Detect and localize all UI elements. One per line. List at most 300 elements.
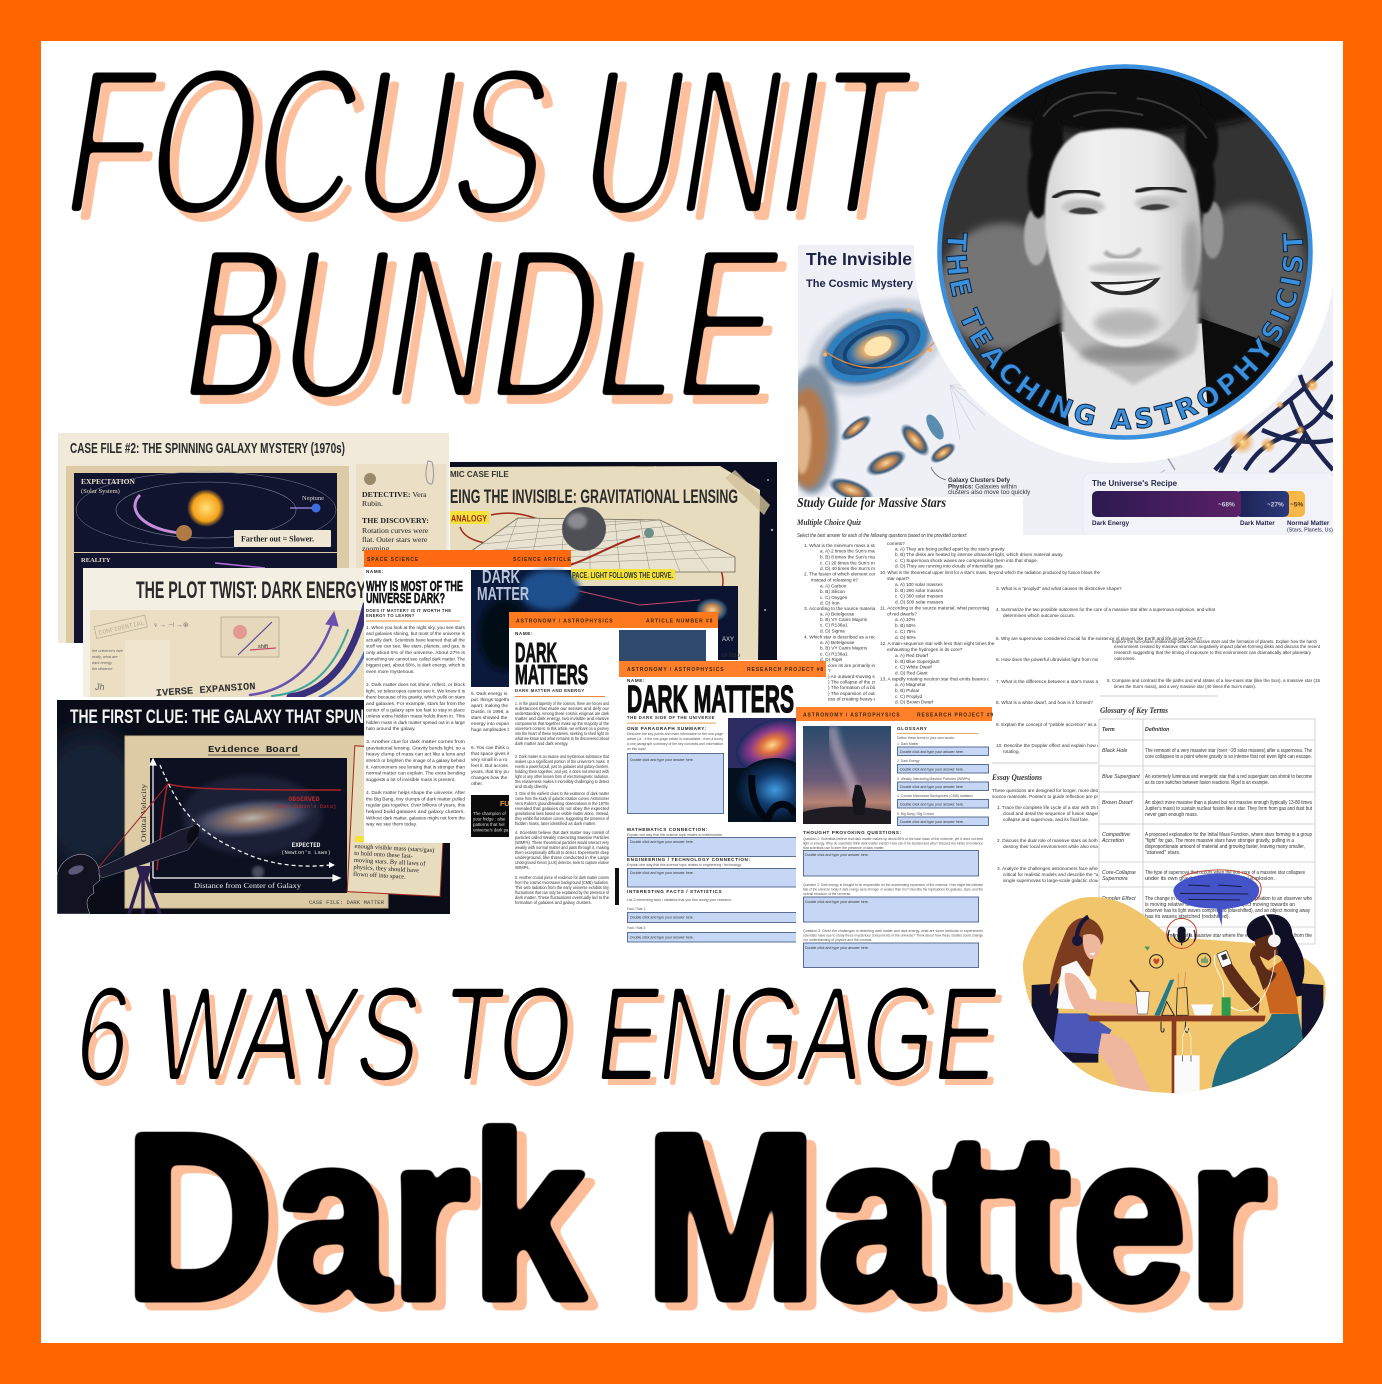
essay fragments: environment created by massive stars can negatively impact planet-forming disks and discuss the recent [1114,644,1321,649]
article body column: light or any other known form of electromagnetic radiation. [515,774,609,779]
heading: 6 ways to engage: 6 WAYS TO ENGAGE [68,958,1007,1109]
short answer questions: 9. Explain the concept of "pebble accretion" as a n [996,722,1101,727]
interesting facts: Double click and type your answer here. [630,916,694,920]
quiz column two: a. A) Magnetar [895,682,926,687]
quiz column one: 2. The fusion of which element con [804,572,877,576]
glossary table: Core-Collapse [1102,870,1136,876]
sidebar: detective notes: Rubin. [362,499,383,508]
article body column: matter and dark energy, two invisible and elusive [515,716,610,721]
quiz column two: 12. A main-sequence star with less than eight times the [880,641,995,646]
quiz column one: d. D) 40 times the Sun's mass [820,566,883,571]
short answer questions: 7. What is the difference between a star's mass an [996,679,1101,684]
article body column: gravitational lensing. Gravity bends light, so a [366,745,465,751]
interesting facts: Double click and type your answer here. [630,936,694,940]
article second column: huge amplitudes bo [471,727,513,733]
short answer questions: 6. How does the powerful ultraviolet light from mas [996,657,1102,662]
chairs [1032,983,1098,1063]
diagram: reality: REALITY [81,557,111,564]
rotation chart: (Vera Rubin's Data) [274,803,336,810]
left woman skirt [1052,1013,1112,1054]
quiz column two: a. A) 100 solar masses [895,582,943,587]
article header [509,612,718,628]
engineering connection: Explain one way that this science topic relates to engineering / technology: [627,863,742,867]
essay fragments [1107,639,1321,689]
thought provoking questions: Double click and type your answer here. [805,900,869,904]
expansion arrows [250,605,366,697]
bowling ball [562,507,606,551]
confidential stamp [94,615,147,638]
essay fragments: times the Sun's mass), and a very massive star (40 times the Sun's mass). [1114,684,1256,689]
table items: cup [1136,992,1149,1014]
eyebrows [1054,191,1098,197]
short answer questions: 10. Describe the Doppler effect and explain how col [996,743,1103,748]
project header [619,661,826,677]
title: bundle [169,203,806,454]
quiz column two: exhausting the hydrogen in its core? [887,647,963,652]
article body column: (WIMPs). These theoretical particles would interact very [515,840,610,845]
essay questions: 1. Trace the complete life cycle of a star with 25 tim [997,805,1103,810]
note card: to hold onto these fast- [354,850,413,860]
quiz column two: b. B) Blue Supergiant [895,659,940,664]
title: focus unit [51,24,932,268]
lensing heading: EING THE INVISIBLE: GRAVITATIONAL LENSING [450,487,738,508]
bar labels [1092,520,1333,532]
eye sockets [1062,199,1105,214]
article body column: there because of its gravity, which pulls on stars [366,695,466,701]
article body column: hidden mass, later identified as dark matter. [515,821,596,826]
article headline: WHY IS MOST OF THE [366,579,463,595]
project subhead: THE DARK SIDE OF THE UNIVERSE [627,715,715,720]
ears [1024,208,1048,265]
article body column: particles called Weakly Interacting Massive Particles [515,835,609,840]
fun fact box: universe's dark pa [473,828,509,832]
mouth [1090,277,1161,295]
essay fragments: 5. Compare and contrast the life paths and end states of a low-mass star (like the Sun), a massive star (15 [1107,678,1320,683]
bar labels: (Stars, Planets, Us) [1287,528,1333,534]
article body column: center of a galaxy spin too fast to stay in place [366,707,465,713]
bar values: ~5% [1290,502,1303,508]
evidence board [125,736,388,908]
essay questions: single supernovas to large-scale galactic clouds [1003,878,1103,883]
heading: 6 ways to engage [68,958,1013,1115]
article body column: the Big Bang, tiny clumps of dark matter pulled [366,796,465,802]
article headline: MATTERS [515,659,588,690]
hand notes: dark energy [92,661,113,665]
first clue heading: THE FIRST CLUE: THE GALAXY THAT SPUN [70,707,364,728]
article body column: underground, like those conducted in the Large [515,855,610,860]
smile lines [1088,262,1162,274]
glossary block: 5. Big Bang / Big Crunch [897,812,934,816]
quiz column one: b. B) VY Canis Majoris [820,646,868,650]
glossary block: GLOSSARY [897,726,927,731]
glossary table: is moving relative to the wave source. An object moving towards an [1145,902,1295,908]
glossary table: "fight" for gas. The more massive stars have stronger gravity, pulling in a [1145,838,1294,844]
article body column: components that together make up the majority of the [515,721,610,726]
article cover image: DARK [482,567,520,587]
article body column: heavy clump of mass can act like a lens and [366,752,465,758]
article body column: weakly with normal matter and pass through it, making [515,845,610,850]
bowl [1191,1004,1213,1015]
article subhead: ENERGY TO LEARN? [366,613,415,618]
sidebar: detective notes: flat. Outer stars were [362,535,428,544]
article body column: dark matter and dark energy. [515,741,569,746]
parchment [90,610,365,697]
article second column: very small in a ro [471,757,508,763]
illustration: web glows [1229,378,1319,455]
light follows tag: PACE. LIGHT FOLLOWS THE CURVE. [572,571,673,580]
quiz column one: c. C) 20 times the Sun's mass [820,560,883,566]
white ring [914,245,1333,463]
engineering connection: Double click and type your answer here. [630,871,694,875]
short answer questions [996,586,1216,754]
glossary block: 1. Dark Matter [897,742,919,746]
glossary table: core collapses to a point where gravity is so intense that not even light can escape. [1145,754,1312,760]
text block: study guide [796,495,1216,883]
note card: moving stars. By all laws of [354,857,426,868]
glossary table: has its waves stretched (redshifted). [1145,914,1230,920]
summary section: on this topic! [627,747,646,751]
article body column: 4. Scientists believe that dark matter may consist of [515,830,610,835]
light follows tag [571,569,675,580]
thought provoking questions [803,830,983,968]
hand notes: really, what are [92,655,117,659]
glossary table: Doppler Effect [1102,896,1136,902]
quiz column one: ) The formation of a black [828,685,882,690]
folder [66,466,349,643]
article body column: from the cosmic microwave background (CMB) radiation. [515,880,609,885]
math connection: Double click and type your answer here. [630,840,694,844]
earphone cable [1214,950,1275,1011]
article second column: Dustin. In 1998, also [471,709,515,715]
glossary table: Brown Dwarf [1102,800,1133,806]
glossary block: Double click and type your answer here. [900,802,964,806]
glossary table: The phenomenon of a massive star where the exterior is blown away from the [1145,933,1312,939]
portrait: the teaching astrophysicist [914,64,1333,463]
title: focus unit: FOCUS UNIT [51,24,923,259]
glossary table: The type of supernova that occurs when the iron core of a massive star collapses [1145,870,1305,876]
article body column: unless extra hidden mass holds them in. This [366,714,466,720]
quiz column two: star apart? [887,576,910,581]
article body column: Vera Rubin's groundbreaking observations in the 1970s [515,801,609,806]
quiz column two: b. B) 50% [895,623,916,628]
quiz column two: d. D) They are running into clouds of interstellar gas. [895,564,1004,568]
background blob [1023,897,1326,1093]
article header: ASTRONOMY / ASTROPHYSICS [516,618,613,624]
fun fact box: FU [500,801,509,808]
short answer questions: 8. What is a white dwarf, and how is it formed? [996,700,1093,705]
article second column: that space gives it [471,751,510,757]
short answer questions: 3. What is a "proplyd" and what causes its distinctive shape? [996,586,1122,591]
panel: article dark matters [509,612,718,907]
article body column: way we see them today. [366,822,417,828]
article second column: energy into expan [471,721,509,727]
rotation chart: Orbital Velocity [140,783,148,842]
quiz column two: b. B) Pulsar [895,688,920,693]
hand notes [92,649,123,692]
multiple choice heading: Multiple Choice Quiz [796,517,862,527]
thought provoking questions: our understanding of physics and the cosmos. [803,938,872,942]
red link line [98,784,168,868]
name label: NAME: [515,631,533,636]
article body column: 1. When you look at the night sky, you see stars [366,625,466,631]
title: focus unit: FOCUS UNIT [60,33,932,268]
curved name text: THE TEACHING ASTROPHYSICIST [946,232,1304,430]
quiz column two: c. C) Supernova shock waves are compressing them into that shape. [895,558,1038,563]
article body column: holding them together, and yet, it does not interact with [515,769,610,774]
observed curve [157,784,341,870]
bar labels: Dark Matter [1240,520,1275,527]
axes [150,759,340,881]
panel: plot twist dark energy [83,568,366,700]
bar: normal matter [1285,491,1305,517]
article subhead: DARK MATTER AND ENERGY [515,688,585,693]
left woman hair back [1050,918,1103,997]
article body column: actually dark. Scientists have learned that all the [366,637,465,643]
callout: galaxy clusters [931,467,1031,496]
interesting facts: INTERESTING FACTS / STATISTICS [627,889,722,894]
bar labels: Dark Energy [1092,520,1130,527]
shopping bag [1174,1055,1200,1094]
note card: physics, they should have [353,864,419,874]
heading: 6 ways to engage: 6 WAYS TO ENGAGE [74,964,1013,1115]
essay questions: source materials. Pointers to guide reflection are provid [992,794,1107,799]
left headphones [1077,917,1088,940]
speech bubble [1173,873,1259,926]
expected curve [160,765,330,866]
essay questions: collapse and supernova, and its final fate. [1003,817,1089,822]
glossary block: Double click and type your answer here. [900,785,964,789]
glossary table: The remnant of a very massive star (over ~20 solar masses) after a supernova. The [1145,748,1312,754]
article headline [515,637,588,690]
phone [1217,950,1232,968]
article body column: came from the study of galactic rotation curves. Astronomer [515,796,610,801]
article body column: into the heart of these mysteries, seeking to shed light on [515,731,610,736]
summary section: article (or - if the one-page article is unavailable - from a book) [627,737,723,741]
article body column: gravitational laws based on visible matter alone. Instead, [515,811,609,816]
quiz column two: d. D) 90% [895,635,916,640]
right woman shirt [1265,959,1298,1014]
quiz column one: d. D) Rigel [820,657,842,662]
summary section [627,726,724,814]
article body column: Underground Xenon (LUX) detector, seek to capture elusive [515,860,610,865]
glossary table: An object more massive than a planet but not massive enough (typically 13-80 times [1145,800,1312,806]
article second column: changes how the u [471,775,512,781]
illustration: galaxy cluster [828,414,956,497]
article body column: light, so telescopes cannot see it. We know it is [366,688,466,694]
quiz column one: a. A) Betelgeuse [820,640,855,645]
shirt [1062,323,1210,443]
left woman leg [1098,1033,1152,1093]
photo [942,68,1308,436]
summary section: ONE PARAGRAPH SUMMARY: [627,726,707,731]
right woman hair [1247,914,1304,997]
panel: gravitational lensing: rs Into [722,651,741,659]
essay questions: destroy their local environment while also enabl [1003,844,1102,849]
project image [728,709,816,822]
math connection: Explain one way that this science topic relates to mathematics: [627,833,723,837]
quiz column two: a. A) Red Dwarf [895,653,929,658]
study guide white sheet [797,497,1023,537]
tape [725,470,770,515]
table [1088,1016,1266,1021]
panel: poster the invisible [786,245,1335,537]
rotation chart: (Newton's Laws) [281,849,331,856]
right headphones [1265,915,1274,938]
face [1045,128,1201,347]
black margin bar [615,868,619,905]
essay questions: critical for realistic models and describe the "uns [1003,872,1104,877]
annotation arrows [460,513,723,600]
engineering connection: ENGINEERING / TECHNOLOGY CONNECTION: [627,857,751,862]
suit [986,317,1281,426]
quiz column one: d. D) Sigma [820,628,845,634]
glossary table: as its core switches between fusion reactions. Rigel is an example. [1145,780,1269,786]
silhouette of observer [57,854,100,914]
right woman face [1254,933,1278,961]
diagram: expectation solar system: Neptune [302,495,324,502]
hand notes: Jh [94,682,105,692]
quiz column one: a. A) Carbon [820,584,847,588]
illustration: nebula [798,362,842,497]
quiz column two: d. D) 500 solar masses [895,600,944,604]
quiz column one: d. D) Iron [820,600,840,606]
quiz column two: a. A) 10% [895,617,915,622]
glossary block: Double click and type your answer here. [900,768,964,772]
panel: research project 8 [619,661,826,945]
short answer questions: rotating. [1003,749,1020,754]
article second column [471,691,515,837]
fun fact box [471,795,511,837]
glossary table: Definition [1145,727,1170,733]
eyes [1068,208,1098,214]
stubble [1093,310,1160,337]
article body column: halo around the galaxy. [366,726,416,732]
bar values: ~27% [1267,502,1284,508]
quiz column two: 13. A rapidly rotating neutron star that emits beams of X [880,676,996,682]
blue ring [940,66,1310,438]
glossary block: Define these terms in your own words: [897,736,955,740]
glossary table: disproportionate amount of material and growing faster, leaving many smaller, [1145,844,1305,850]
essay fragments: research suggesting that the timing of exposure to this environment can dramatically alter planetary [1114,650,1312,655]
quiz column one: a. A) Betelgeuse [820,612,855,616]
card: the universe's recipe [1083,473,1335,537]
quiz column one: c. C) Oxygen [820,595,848,600]
essay questions: 3. Analyze the challenges astronomers face when [997,866,1101,871]
bag hooks [1161,1022,1189,1032]
telescope [95,823,202,914]
glossary heading: Glossary of Key Terms [1100,706,1168,715]
quiz column two: comets? [887,541,905,546]
glossary block: 4. Cosmic Microwave Background (CMB) radiation [897,794,973,798]
rotation chart: EXPECTED [292,842,321,849]
case file heading: CASE FILE #2: THE SPINNING GALAXY MYSTERY (1970s) [70,440,345,457]
article body column: revealed that galaxies do not obey the expected [515,806,610,811]
diagram: reality [74,553,337,643]
inset: space photo [571,586,738,660]
small marble [644,528,654,538]
thought provoking questions: Question 3: Given the challenges in detecting dark matter and dark energy, what are some methods or experiments [803,929,983,933]
tablet [1154,979,1174,1015]
project header: RESEARCH PROJECT #9 [917,712,994,718]
parchment folder [450,466,760,660]
glossary table: An extremely luminous and energetic star that a red supergiant can shrink to become [1145,774,1312,780]
glossary table: never gain enough mass. [1145,812,1198,818]
quiz column one: b. B) 8 times the Sun's mass [820,554,880,560]
illustration: podcast listeners [1023,870,1326,1096]
article body column: and galaxies shining, but most of the universe is [366,631,466,637]
hair [1026,122,1220,220]
article headline [366,579,463,607]
article header [364,550,572,567]
quiz column two: b. B) 200 solar masses [895,588,944,593]
left woman arm [1065,973,1147,1015]
right woman jeans [1212,1014,1303,1088]
article body column [366,625,466,828]
glossary block [897,726,988,826]
panel: gravitational lensing [450,462,777,660]
quiz column one: instead of releasing it? [811,578,858,582]
thought provoking questions: Question 1: Scientists believe that dark matter makes up about 85% of the total mass of the universe, yet it does not emit [803,837,983,841]
fun fact box: The champion of [473,811,506,816]
project header: ASTRONOMY / ASTROPHYSICS [627,667,724,673]
callout: galaxy clusters: Physics: Galaxies within [948,484,1017,490]
glossary block: 3. Weakly Interacting Massive Particles (WIMPs) [897,777,970,781]
article image [619,630,706,661]
project header: ASTRONOMY / ASTROPHYSICS [803,712,900,718]
quiz column two: a. A) They are being pulled apart by the star's gravity. [895,546,1005,552]
glossary sheet [1098,639,1323,944]
summary section: Double click and type your answer here. [630,758,694,762]
quiz column two: c. C) White Dwarf [895,664,932,670]
diagram: expectation solar system [74,472,337,552]
article body column: hidden mass is dark matter spread out in a large [366,720,465,726]
article headline: UNIVERSE DARK? [366,591,445,607]
sidebar: detective notes: zooming [362,544,389,553]
article body column: only about 5% of the universe. About 27% is [366,650,466,656]
quiz column two [880,541,1100,704]
quiz column two: d. D) Red Giant [895,670,928,676]
article body column: them exceptionally difficult to detect. Experiments deep [515,850,610,855]
short answer questions: determines which outcome occurs. [1003,613,1075,618]
article body column: helped build galaxies and galaxy clusters. [366,809,465,815]
illustration: cosmic web [1150,362,1333,480]
article body column: 2. Dark matter is an elusive and mysterious substance that [515,754,610,759]
essay questions heading: Essay Questions [991,772,1043,782]
article header: ARTICLE NUMBER #8 [646,618,713,624]
quiz column two: 10. What is the theoretical upper limit for a star's mass, beyond which the radiation produced by fusion blows the [880,570,1100,575]
glossary table [1099,719,1315,944]
panel: first clue [35,700,450,914]
article body column: stuff we can see, like stars, planets, and gas, is [366,644,466,650]
thought provoking questions: fate of the universe today if dark energy were stronger or weaker than it is? Describe the implications for galaxies, stars, and the [803,888,983,892]
cheek shadow [1183,220,1200,293]
nose [1105,248,1140,258]
summary section: Describe the key points and main information in the one-page [627,732,723,736]
formula scribble: v → ⊣ →⊛ [154,621,189,629]
project header [796,707,994,721]
chart labels: OBSERVED [288,796,320,803]
math connection [627,827,798,856]
project headline: DARK MATTERS [627,679,794,721]
essay questions: These questions are designed for longer, more detailed [992,788,1107,793]
title: bundle: BUNDLE [178,212,806,454]
interesting facts: Fact / Stat 1: [627,907,646,911]
bar values: ~68% [1218,502,1235,508]
path of light [560,536,640,568]
article body column: it. Astronomers see lensing that is stronger than [366,764,465,770]
thought provoking questions: overall structure of the universe. [803,892,851,896]
article second column: feel it. But across [471,763,508,769]
